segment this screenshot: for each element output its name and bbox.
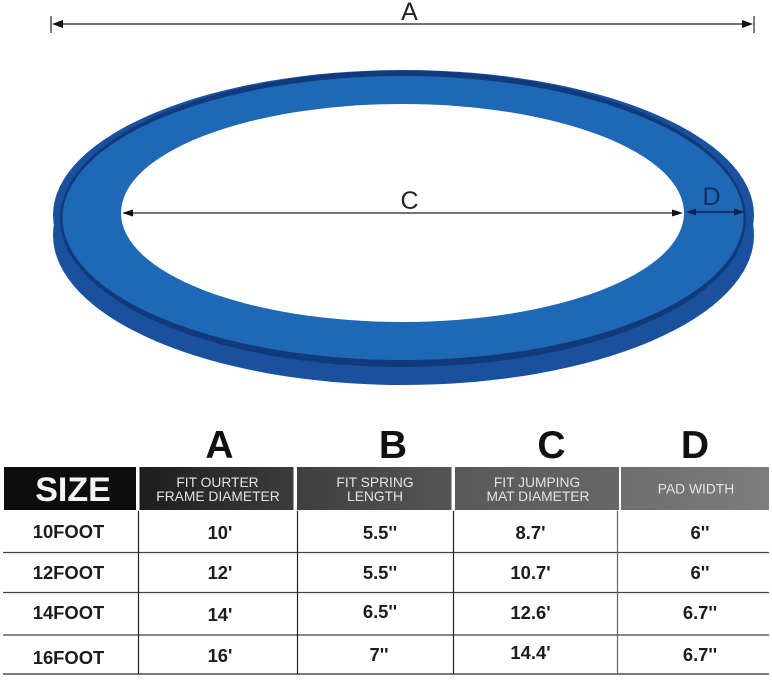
row: 12 foot: 10.7' xyxy=(510,562,551,583)
header: fit jumping mat diameter: MAT DIAMETER xyxy=(487,489,590,504)
header: fit jumping mat diameter: FIT JUMPING xyxy=(494,475,580,490)
header: pad width xyxy=(621,467,769,510)
row: 12 foot: 12FOOT xyxy=(33,562,105,583)
column letters: C xyxy=(537,424,566,467)
row: 12 foot xyxy=(33,562,709,583)
dimension arrow A xyxy=(51,16,754,33)
row: 16 foot: 6.7'' xyxy=(683,644,717,665)
row: 14 foot xyxy=(33,601,717,625)
row: 10 foot: 10FOOT xyxy=(33,521,105,542)
column letters xyxy=(205,424,709,467)
table header xyxy=(4,467,769,510)
header: pad width: PAD WIDTH xyxy=(658,482,734,496)
row: 14 foot: 6.5'' xyxy=(363,601,397,622)
label D: D xyxy=(702,183,721,211)
column letters: B xyxy=(379,424,407,467)
header: fit outer frame diameter: FRAME DIAMETER xyxy=(156,489,280,504)
row: 12 foot: 5.5'' xyxy=(363,562,397,583)
column letters: A xyxy=(205,424,234,467)
row: 10 foot xyxy=(33,521,709,543)
label C: C xyxy=(400,187,419,215)
row: 14 foot: 14FOOT xyxy=(33,602,105,623)
column letters: D xyxy=(681,424,709,467)
row: 16 foot xyxy=(33,642,717,668)
row: 16 foot: 7'' xyxy=(370,644,388,665)
row: 14 foot: 12.6' xyxy=(510,602,551,623)
row: 12 foot: 6'' xyxy=(691,562,709,583)
row: 16 foot: 16' xyxy=(208,645,232,666)
row: 14 foot: 6.7'' xyxy=(683,602,717,623)
header: fit outer frame diameter: FIT OURTER xyxy=(176,475,259,490)
header: fit outer frame diameter xyxy=(140,467,294,510)
row: 16 foot: 14.4' xyxy=(510,642,551,663)
header: fit jumping mat diameter xyxy=(455,467,619,510)
header: fit spring length xyxy=(297,467,452,510)
dimension arrow D xyxy=(686,208,745,216)
header: size xyxy=(4,467,136,510)
row: 16 foot: 16FOOT xyxy=(33,647,105,668)
header: fit spring length: LENGTH xyxy=(347,489,403,504)
trampoline pad ring xyxy=(53,70,754,385)
row: 12 foot: 12' xyxy=(208,562,232,583)
row: 10 foot: 10' xyxy=(208,522,232,543)
row: 14 foot: 14' xyxy=(208,604,232,625)
header: fit spring length: FIT SPRING xyxy=(336,475,414,490)
dimension arrow C xyxy=(122,210,683,216)
header: size: SIZE xyxy=(35,471,111,509)
row: 10 foot: 8.7' xyxy=(516,522,545,543)
row: 10 foot: 6'' xyxy=(691,522,709,543)
row: 10 foot: 5.5'' xyxy=(363,522,397,543)
